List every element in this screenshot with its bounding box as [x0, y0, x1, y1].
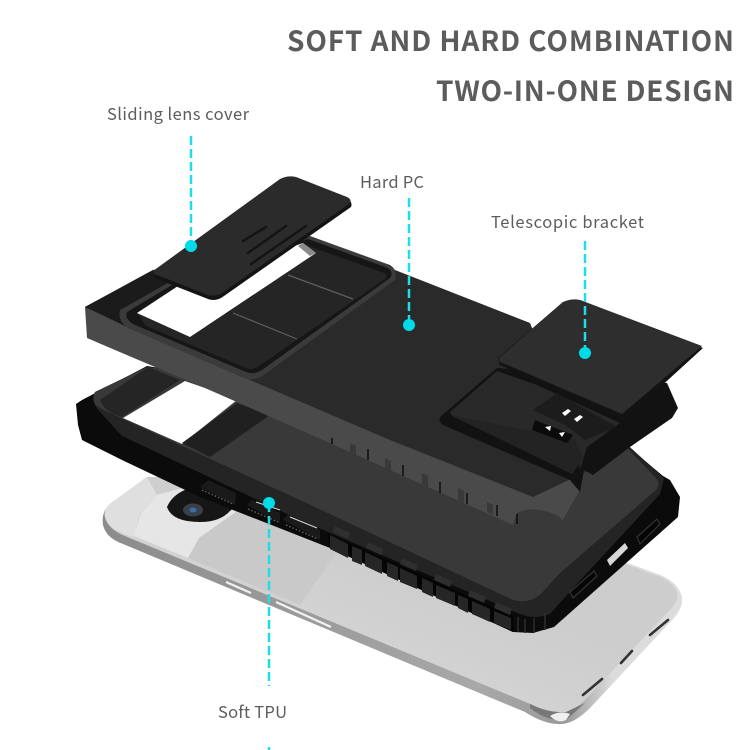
TPU bevel rim — [93, 367, 664, 617]
title: TWO-IN-ONE DESIGN — [436, 70, 734, 110]
callout: sliding lens cover — [107, 101, 250, 252]
callout: telescopic bracket — [491, 209, 644, 359]
PC back face — [85, 237, 590, 497]
PC side wall — [85, 300, 585, 525]
camera window cutout — [137, 243, 316, 337]
callout: soft TPU: Soft TPU — [218, 699, 287, 723]
TPU outer frame — [76, 366, 680, 633]
title: SOFT AND HARD COMBINATION — [287, 20, 734, 60]
telescopic bracket — [439, 299, 703, 492]
grip ridges — [243, 226, 306, 264]
bracket hinge slots — [533, 393, 617, 440]
bracket plate — [498, 300, 703, 421]
phone camera — [167, 489, 240, 522]
TPU inner face — [93, 367, 659, 601]
title — [287, 20, 734, 110]
TPU bracket bars — [100, 367, 180, 417]
frame panel lines — [233, 275, 353, 339]
callout: hard PC — [360, 169, 424, 331]
camera frame — [119, 236, 396, 379]
TPU window cutout — [123, 381, 237, 444]
TPU ridged side blocks — [327, 533, 513, 632]
hard PC shell — [85, 236, 590, 525]
callout: soft TPU — [218, 497, 287, 750]
charging and speaker ports — [583, 620, 668, 695]
side buttons — [226, 582, 331, 627]
silver phone — [103, 477, 682, 724]
TPU right side ports — [570, 519, 660, 598]
TPU side buttons — [200, 480, 320, 540]
soft TPU case — [76, 366, 680, 633]
callout: telescopic bracket: Telescopic bracket — [491, 209, 644, 233]
sliding lens cover — [153, 176, 352, 300]
TPU corner ribs — [518, 613, 545, 633]
callout: sliding lens cover: Sliding lens cover — [107, 101, 250, 125]
PC wall teeth — [350, 443, 493, 515]
bracket base — [439, 368, 678, 492]
callout: hard PC: Hard PC — [360, 169, 424, 193]
